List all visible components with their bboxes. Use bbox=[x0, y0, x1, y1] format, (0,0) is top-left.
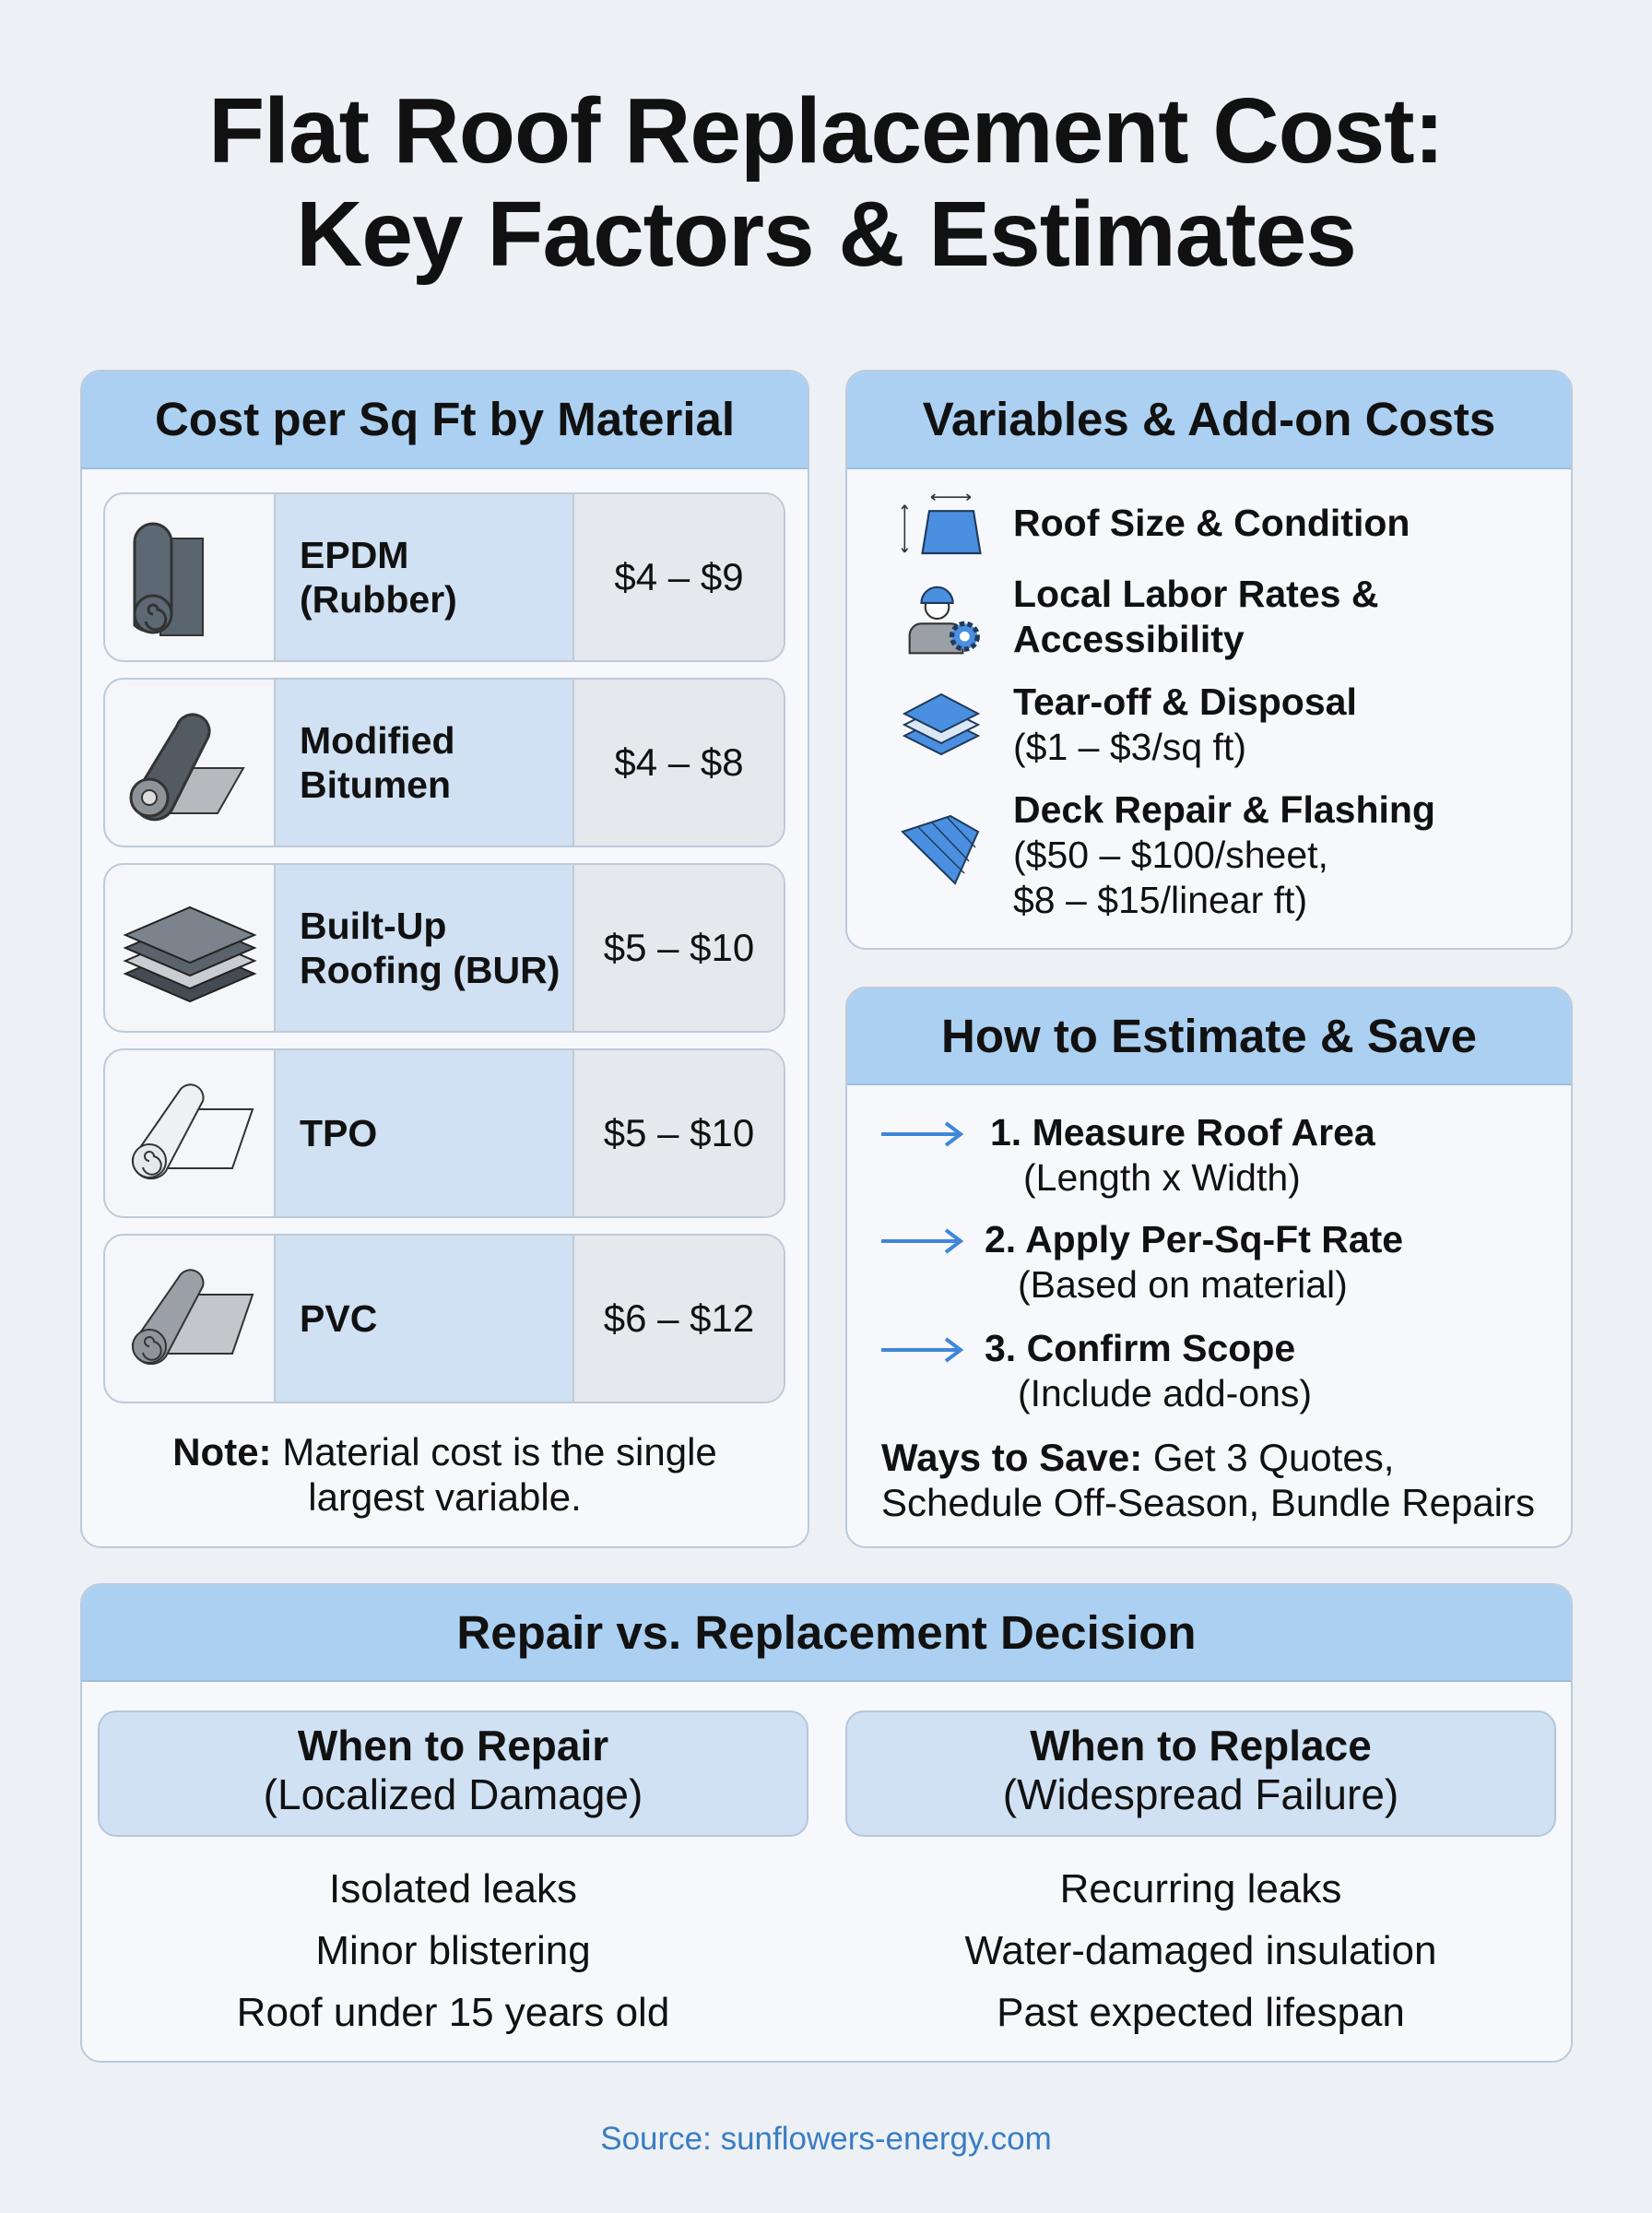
row: BUR: Roofing (BUR) bbox=[300, 949, 560, 991]
item: labor: Local Labor Rates & bbox=[1013, 573, 1378, 615]
ways to save: Schedule Off-Season, Bundle Repairs bbox=[881, 1481, 1535, 1524]
row: modified bitumen: Modified bbox=[300, 719, 455, 762]
source: Source: sunflowers-energy.com bbox=[600, 2121, 1052, 2157]
list: repair bbox=[237, 1866, 669, 2035]
item: deck repair bbox=[1013, 788, 1435, 921]
row: modified bitumen: $4 – $8 bbox=[614, 740, 744, 784]
row: BUR: $5 – $10 bbox=[604, 926, 754, 969]
subheader: when to replace bbox=[845, 1710, 1556, 1837]
heading: repair vs replacement bbox=[82, 1585, 1571, 1682]
arrow 1 bbox=[881, 1121, 964, 1147]
panel: variables & add-on costs bbox=[845, 370, 1573, 950]
subheader: when to replace: (Widespread Failure) bbox=[1003, 1770, 1398, 1818]
ways to save: Ways to Save: Get 3 Quotes, bbox=[881, 1436, 1394, 1479]
row: BUR bbox=[103, 863, 785, 1033]
icon: white roll bbox=[131, 1083, 254, 1180]
row: TPO bbox=[103, 1048, 785, 1218]
icon: layers bbox=[124, 905, 256, 1003]
heading: variables: Variables & Add-on Costs bbox=[923, 393, 1495, 445]
step 3: (Include add-ons) bbox=[1018, 1372, 1312, 1414]
list: repair: Isolated leaks bbox=[329, 1866, 577, 1911]
icon: grey roll bbox=[131, 1269, 254, 1365]
heading: cost per sq ft bbox=[82, 372, 808, 469]
row: modified bitumen: Bitumen bbox=[300, 763, 451, 806]
row: BUR: Built-Up bbox=[300, 905, 446, 947]
row: EPDM: $4 – $9 bbox=[614, 555, 744, 598]
panel: cost per sq ft by material bbox=[80, 370, 809, 1548]
row: modified bitumen bbox=[103, 678, 785, 847]
step 1 bbox=[990, 1111, 1375, 1199]
list: replace: Past expected lifespan bbox=[997, 1990, 1405, 2035]
heading: repair vs replacement: Repair vs. Replacement Decision bbox=[456, 1606, 1197, 1659]
item: labor: Accessibility bbox=[1013, 618, 1245, 660]
row: EPDM: EPDM bbox=[300, 534, 408, 576]
title bbox=[208, 79, 1444, 286]
row: PVC bbox=[103, 1234, 785, 1403]
icon: worker gear bbox=[909, 586, 980, 655]
row: PVC: $6 – $12 bbox=[604, 1296, 754, 1340]
item: labor bbox=[1013, 573, 1378, 660]
step 2: (Based on material) bbox=[1018, 1263, 1348, 1306]
ways to save bbox=[881, 1436, 1535, 1524]
step 2 bbox=[985, 1218, 1403, 1306]
step 3 bbox=[985, 1327, 1312, 1414]
subheader: when to repair bbox=[98, 1710, 808, 1837]
subheader: when to repair: When to Repair bbox=[298, 1722, 608, 1769]
title: Key Factors & Estimates bbox=[296, 183, 1356, 286]
panel: repair vs replacement bbox=[80, 1583, 1573, 2063]
icon: rubber roll bbox=[133, 522, 204, 636]
step 1: (Length x Width) bbox=[1023, 1156, 1301, 1199]
row: EPDM: (Rubber) bbox=[300, 578, 457, 621]
item: deck repair: ($50 – $100/sheet, bbox=[1013, 834, 1328, 876]
item: tear-off: Tear-off & Disposal bbox=[1013, 680, 1357, 723]
list: replace bbox=[964, 1866, 1436, 2035]
row: TPO: $5 – $10 bbox=[604, 1111, 754, 1154]
heading: cost per sq ft: Cost per Sq Ft by Material bbox=[155, 393, 735, 445]
item: deck repair: $8 – $15/linear ft) bbox=[1013, 879, 1307, 921]
arrow 2 bbox=[881, 1228, 964, 1254]
note: largest variable. bbox=[308, 1475, 582, 1519]
heading: estimate: How to Estimate & Save bbox=[941, 1010, 1477, 1062]
item: deck repair: Deck Repair & Flashing bbox=[1013, 788, 1435, 831]
list: replace: Water-damaged insulation bbox=[964, 1928, 1436, 1973]
item: tear-off: ($1 – $3/sq ft) bbox=[1013, 726, 1246, 768]
icon: bitumen roll bbox=[129, 713, 245, 821]
icon: deck bbox=[901, 815, 979, 885]
item: tear-off bbox=[1013, 680, 1357, 768]
subheader: when to repair: (Localized Damage) bbox=[264, 1770, 643, 1818]
row: PVC: PVC bbox=[300, 1297, 377, 1340]
panel: how to estimate & save bbox=[845, 987, 1573, 1548]
step 2: 2. Apply Per-Sq-Ft Rate bbox=[985, 1218, 1403, 1260]
row: EPDM bbox=[103, 492, 785, 662]
list: replace: Recurring leaks bbox=[1060, 1866, 1341, 1911]
row: TPO: TPO bbox=[300, 1112, 377, 1154]
note bbox=[172, 1430, 717, 1519]
icon: roof size bbox=[902, 493, 982, 555]
note: Note: Material cost is the single bbox=[172, 1430, 717, 1473]
title: Flat Roof Replacement Cost: bbox=[208, 79, 1444, 183]
list: repair: Roof under 15 years old bbox=[237, 1990, 669, 2035]
item: roof size: Roof Size & Condition bbox=[1013, 502, 1410, 544]
step 1: 1. Measure Roof Area bbox=[990, 1111, 1375, 1154]
heading: variables bbox=[847, 372, 1571, 469]
arrow 3 bbox=[881, 1337, 964, 1363]
list: repair: Minor blistering bbox=[315, 1928, 591, 1973]
icon: layers blue bbox=[902, 693, 981, 756]
subheader: when to replace: When to Replace bbox=[1030, 1722, 1372, 1769]
step 3: 3. Confirm Scope bbox=[985, 1327, 1295, 1369]
heading: estimate bbox=[847, 988, 1571, 1085]
